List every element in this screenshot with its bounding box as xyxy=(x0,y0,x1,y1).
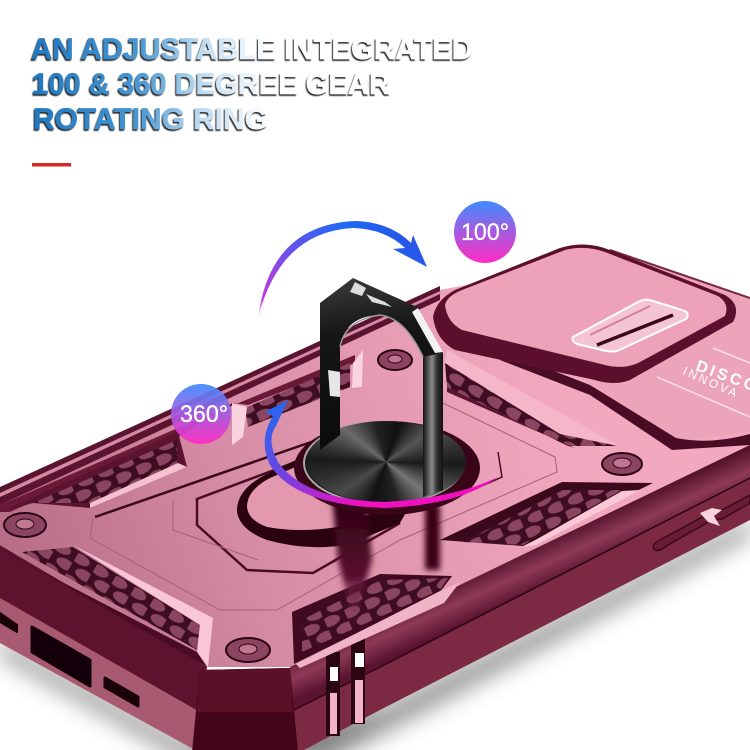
upper rim xyxy=(0,286,440,505)
red accent bar xyxy=(32,163,71,166)
phone case xyxy=(0,221,750,750)
ring plate octagon xyxy=(90,403,557,610)
grip strip: front right xyxy=(292,574,460,668)
ring stand xyxy=(320,278,443,497)
title: AN ADJUSTABLE INTEGRATED xyxy=(30,34,472,67)
drop shadow xyxy=(0,520,750,750)
badge: 360 degrees: 360° xyxy=(180,401,228,428)
camera slider panel xyxy=(500,250,750,450)
arrow: 100 degree xyxy=(258,221,427,318)
corner stripes xyxy=(326,638,365,736)
title xyxy=(30,33,473,137)
title: 100 & 360 DEGREE GEAR xyxy=(31,69,389,102)
arrow: 360 degree xyxy=(265,400,498,508)
stadium recess xyxy=(237,458,430,547)
grip strip: upper right xyxy=(445,350,618,448)
grip strip: left lower xyxy=(0,545,213,667)
badge: 100 degrees: 100° xyxy=(461,219,509,246)
slide grip xyxy=(572,300,688,352)
grip strip: upper left xyxy=(0,432,187,512)
grip strip: upper middle xyxy=(232,350,363,445)
title: ROTATING RING xyxy=(32,104,267,137)
top face xyxy=(0,260,750,667)
title: ROTATING RING xyxy=(33,103,268,136)
title: AN ADJUSTABLE INTEGRATED xyxy=(31,33,473,66)
right side face xyxy=(290,443,750,750)
ring socket and disc xyxy=(294,421,480,515)
back-left dark wedge xyxy=(0,355,355,512)
grip strip: right lower xyxy=(440,482,653,547)
camera cover xyxy=(433,244,750,383)
badge: 360 degrees xyxy=(171,384,231,444)
front face with ports xyxy=(0,545,298,750)
title: 100 & 360 DEGREE GEAR xyxy=(32,68,390,101)
slider print: INNOVA xyxy=(681,364,741,401)
screws xyxy=(4,350,642,662)
ring reflections xyxy=(332,495,440,622)
badge: 100 degrees xyxy=(454,201,516,263)
